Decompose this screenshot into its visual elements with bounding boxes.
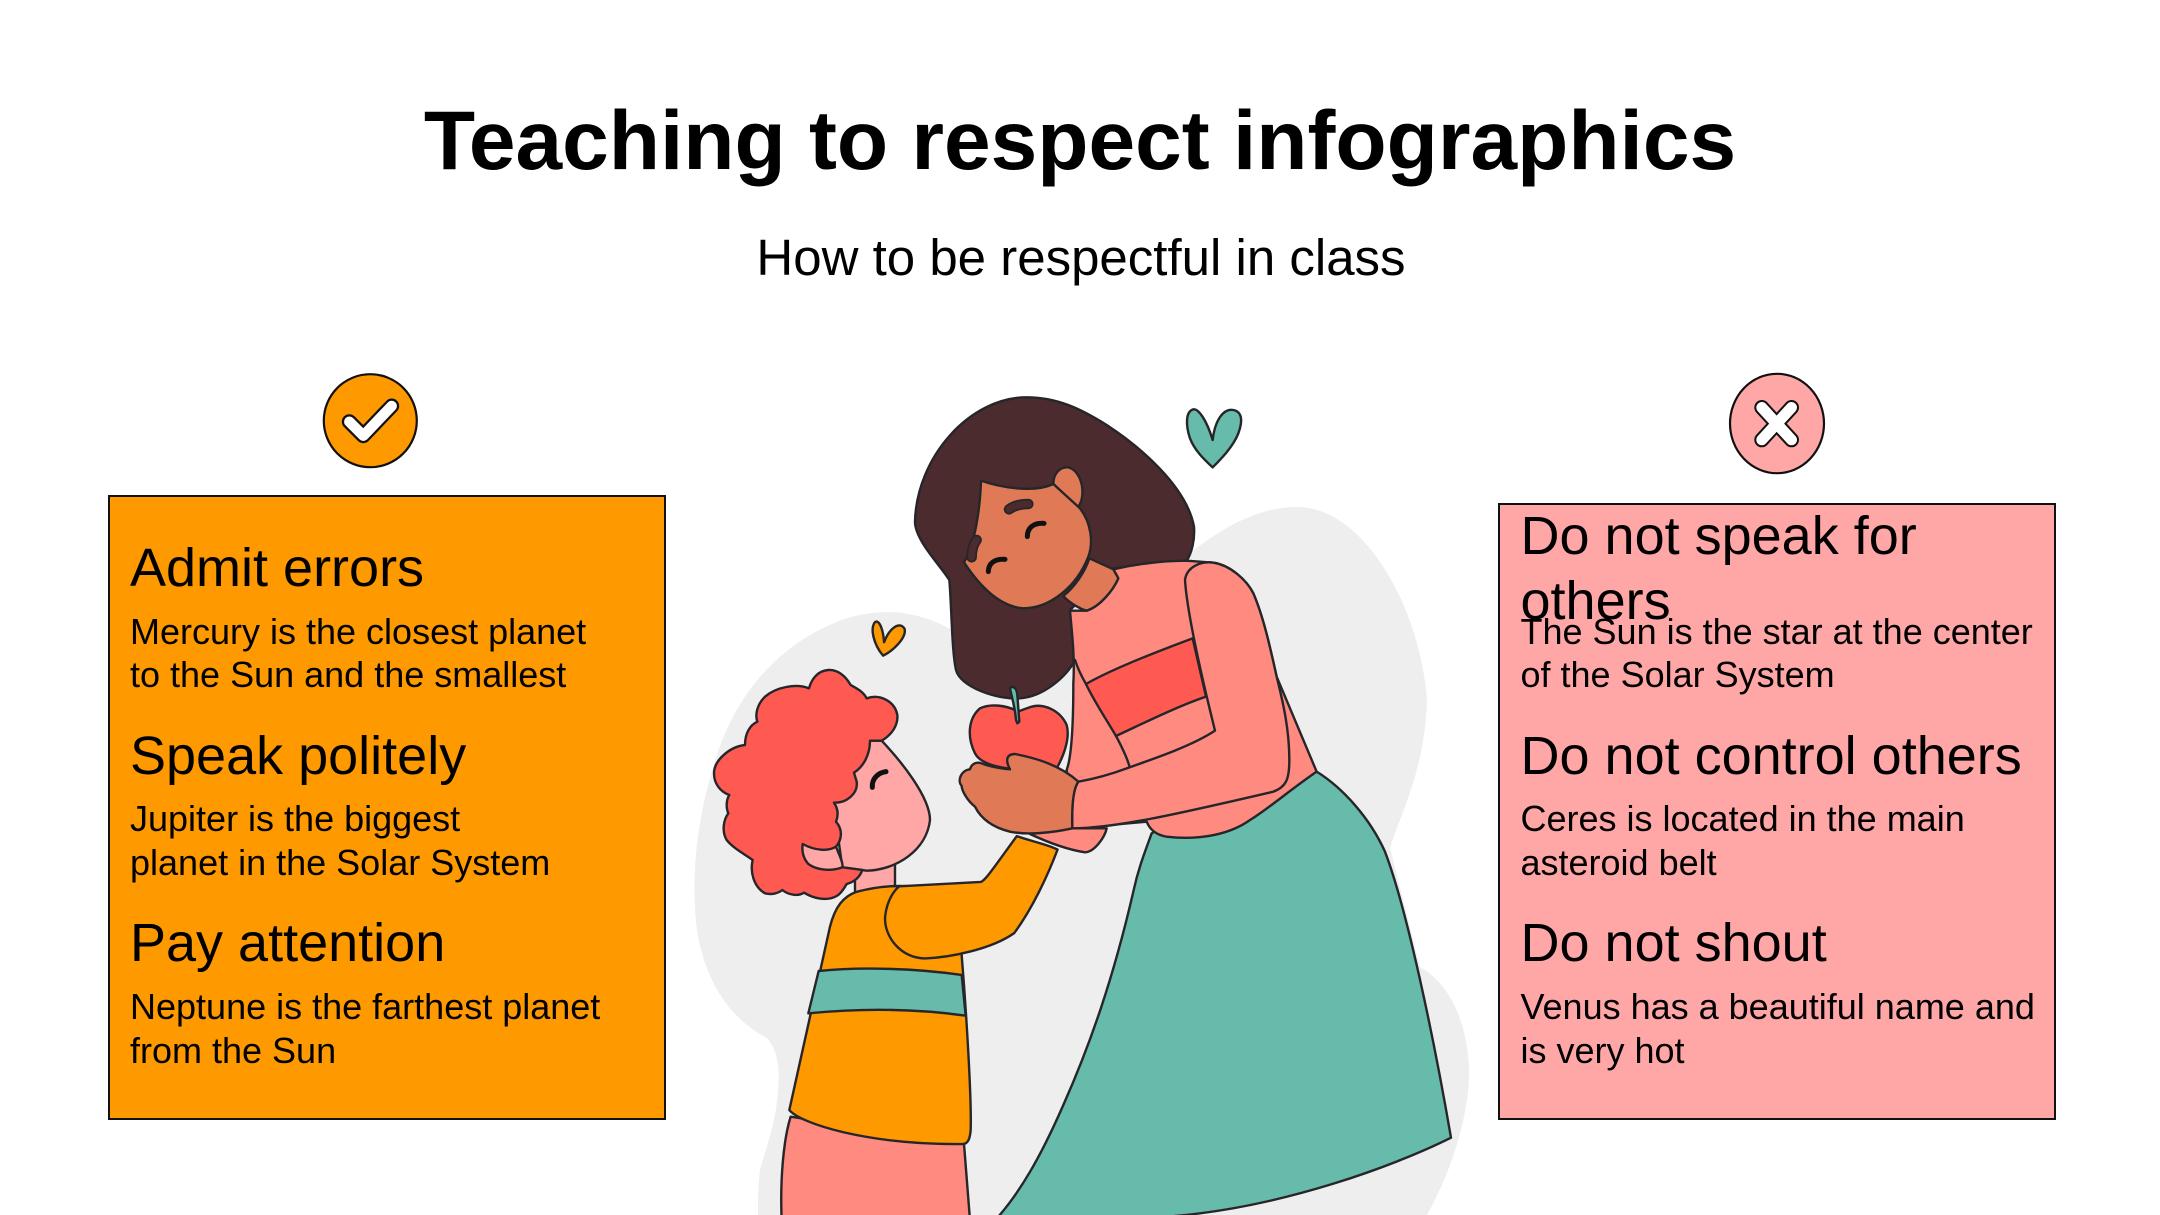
woman: eyebrows bbox=[972, 504, 1028, 557]
item: pay attention bbox=[130, 913, 600, 1071]
item: do not control others: Do not control others bbox=[1520, 726, 2022, 786]
woman: hair bbox=[915, 397, 1194, 698]
panel background bbox=[1499, 504, 2055, 1119]
woman: lower arm bbox=[1030, 828, 1107, 852]
item: do not speak for others: of the Solar System bbox=[1520, 654, 1835, 695]
woman: chest fold bbox=[1075, 660, 1129, 766]
woman: skirt bbox=[998, 772, 1451, 1215]
item: pay attention: Pay attention bbox=[130, 913, 445, 973]
item: do not shout: is very hot bbox=[1520, 1030, 1685, 1071]
woman: eyes bbox=[988, 523, 1044, 572]
item: admit errors: Admit errors bbox=[130, 538, 424, 598]
heart: orange bbox=[873, 622, 905, 656]
title: Teaching to respect infographics bbox=[424, 93, 1736, 187]
woman: hand bbox=[960, 754, 1078, 833]
child: shirt bbox=[789, 886, 971, 1144]
woman: torso bbox=[1067, 561, 1317, 838]
child: ear bbox=[802, 844, 843, 870]
icon: cross badge bbox=[1730, 374, 1824, 473]
child: face bbox=[833, 741, 930, 871]
child: arm bbox=[885, 836, 1058, 958]
subtitle: How to be respectful in class bbox=[756, 229, 1406, 286]
icon: check mark badge bbox=[324, 374, 417, 467]
child: neck bbox=[855, 863, 895, 893]
item: pay attention: Neptune is the farthest planet bbox=[130, 986, 600, 1027]
item: do not speak for others: The Sun is the star at the center bbox=[1520, 611, 2033, 652]
woman: neck bbox=[1063, 558, 1118, 611]
child: eye bbox=[872, 772, 886, 787]
item: speak politely: Jupiter is the biggest bbox=[130, 798, 460, 839]
item: admit errors bbox=[130, 538, 586, 695]
item: do not speak for others bbox=[1520, 506, 2033, 695]
item: do not control others bbox=[1520, 726, 2022, 883]
item: do not speak for others: Do not speak for bbox=[1520, 506, 1917, 566]
item: do not shout: Venus has a beautiful name and bbox=[1520, 986, 2035, 1027]
child: curly hair bbox=[714, 670, 897, 899]
item: do not shout: Do not shout bbox=[1520, 913, 1827, 973]
item: speak politely: planet in the Solar System bbox=[130, 842, 550, 883]
item: do not control others: asteroid belt bbox=[1520, 842, 1717, 883]
illustration: woman giving an apple to a child bbox=[694, 397, 1469, 1215]
woman: arm bbox=[1072, 562, 1289, 828]
item: do not speak for others: others bbox=[1520, 571, 1671, 631]
panel background bbox=[109, 496, 665, 1119]
apple bbox=[970, 705, 1068, 768]
item: do not shout bbox=[1520, 913, 2035, 1071]
item: admit errors: Mercury is the closest planet bbox=[130, 611, 586, 652]
child: trousers bbox=[781, 1117, 970, 1215]
woman: ear bbox=[1053, 467, 1082, 507]
child: shirt band bbox=[808, 969, 966, 1016]
item: speak politely: Speak politely bbox=[130, 726, 466, 786]
apple stem bbox=[1010, 687, 1019, 723]
woman: shirt band bbox=[1086, 638, 1206, 736]
panel: do not list bbox=[1499, 504, 2055, 1119]
item: admit errors: to the Sun and the smallest bbox=[130, 654, 566, 695]
woman: face bbox=[964, 481, 1091, 608]
panel: do list bbox=[109, 496, 665, 1119]
item: do not control others: Ceres is located in the main bbox=[1520, 798, 1965, 839]
heart: teal bbox=[1187, 409, 1241, 467]
item: pay attention: from the Sun bbox=[130, 1030, 336, 1071]
item: speak politely bbox=[130, 726, 550, 883]
background blob bbox=[694, 507, 1469, 1215]
